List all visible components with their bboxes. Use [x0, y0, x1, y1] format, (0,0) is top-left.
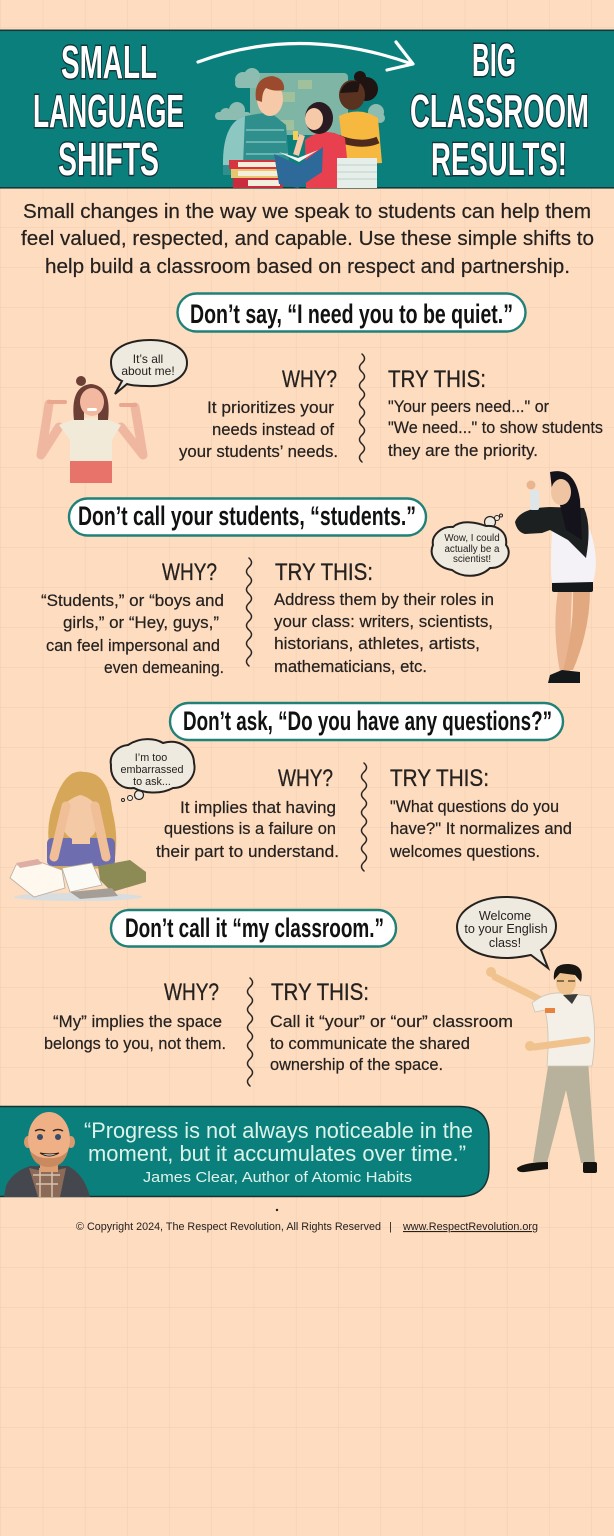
try this column: historians, athletes, artists,: [274, 635, 480, 653]
try this column: [274, 559, 494, 676]
copyright footer: [76, 1221, 538, 1233]
title: small language shifts: SMALL: [61, 36, 157, 88]
quote text: James Clear, Author of Atomic Habits: [143, 1169, 412, 1186]
callout: it's all about me: about me!: [121, 364, 175, 378]
why column: [156, 765, 339, 861]
panel: tip 1: [41, 294, 603, 483]
try this column: mathematicians, etc.: [274, 658, 427, 676]
quote text: [84, 1118, 473, 1186]
heading pill: Don’t call your students, “students.”: [78, 501, 416, 531]
panel: tip 2: [41, 471, 596, 683]
title: big classroom results: [410, 34, 589, 185]
man: [223, 112, 290, 175]
title: small language shifts: SHIFTS: [58, 133, 159, 185]
try this column: TRY THIS:: [275, 559, 373, 586]
callout: wow, I could actually be a scientist: Wow, I could: [444, 533, 500, 544]
woman in red: [305, 132, 350, 188]
callout: wow, I could actually be a scientist: scientist!: [453, 554, 491, 565]
dot mark: [276, 1209, 278, 1211]
intro text: [21, 201, 594, 278]
try this column: [388, 366, 603, 460]
heading pill: [69, 498, 426, 536]
callout: I'm too embarrassed to ask: embarrassed: [120, 764, 184, 776]
header banner: [0, 30, 614, 189]
copyright footer: © Copyright 2024, The Respect Revolution, All Rights Reserved: [76, 1221, 381, 1233]
squiggle divider: [246, 558, 252, 666]
why column: their part to understand.: [156, 843, 339, 861]
why column: girls,” or “Hey, guys,”: [63, 614, 219, 632]
intro text: feel valued, respected, and capable. Use these simple shifts to: [21, 228, 594, 250]
title: small language shifts: [33, 36, 184, 185]
try this column: [389, 765, 572, 861]
why column: [44, 979, 226, 1053]
try this column: they are the priority.: [388, 442, 538, 460]
callout: it's all about me: It’s all: [133, 352, 163, 366]
arrow: [198, 42, 413, 70]
copyright footer: www.RespectRevolution.org: [402, 1221, 538, 1233]
why column: WHY?: [164, 979, 219, 1006]
copyright footer: |: [389, 1221, 392, 1233]
try this column: ownership of the space.: [270, 1056, 443, 1074]
portrait: James Clear: [4, 1112, 90, 1197]
panel: tip 3: [10, 703, 572, 901]
icon: embarrassed student at books: [10, 772, 146, 901]
illustration: three teachers with books: [215, 68, 385, 188]
icon: student holding a test tube: [515, 471, 596, 683]
heading pill: [178, 294, 526, 332]
callout: welcome to your English class: to your English: [464, 922, 548, 936]
why column: It implies that having: [180, 799, 336, 817]
try this column: TRY THIS:: [271, 979, 369, 1006]
intro text: help build a classroom based on respect and partnership.: [45, 256, 570, 278]
quote text: moment, but it accumulates over time.”: [88, 1141, 466, 1166]
quote banner: [0, 1106, 489, 1197]
callout: welcome to your English class: [457, 897, 556, 968]
callout: I'm too embarrassed to ask: to ask...: [133, 776, 171, 788]
why column: “Students,” or “boys and: [41, 592, 224, 610]
squiggle divider: [360, 354, 364, 462]
quote text: “Progress is not always noticeable in the: [84, 1118, 473, 1143]
callout: I'm too embarrassed to ask: I’m too: [135, 752, 167, 764]
why column: WHY?: [282, 366, 337, 393]
why column: needs instead of: [212, 421, 334, 439]
why column: “My” implies the space: [53, 1013, 222, 1031]
try this column: have?" It normalizes and: [390, 820, 572, 838]
heading pill: [111, 910, 396, 946]
title: small language shifts: LANGUAGE: [33, 85, 184, 137]
why column: questions is a failure on: [164, 820, 336, 838]
try this column: to communicate the shared: [270, 1035, 470, 1053]
callout: wow, I could actually be a scientist: [432, 514, 509, 576]
why column: WHY?: [278, 765, 333, 792]
try this column: [270, 979, 513, 1074]
try this column: welcomes questions.: [389, 843, 540, 861]
why column: can feel impersonal and: [46, 637, 220, 655]
panel: tip 4: [44, 897, 597, 1173]
why column: belongs to you, not them.: [44, 1035, 226, 1053]
squiggle divider: [362, 763, 366, 871]
try this column: "Your peers need..." or: [388, 398, 549, 416]
callout: it's all about me: [111, 340, 187, 394]
why column: [179, 366, 338, 461]
squiggle divider: [248, 978, 252, 1086]
callout: wow, I could actually be a scientist: actually be a: [444, 544, 500, 555]
try this column: Address them by their roles in: [274, 591, 494, 609]
icon: woman pointing at herself: [41, 376, 143, 483]
intro text: Small changes in the way we speak to students can help them: [23, 201, 591, 223]
try this column: Call it “your” or “our” classroom: [270, 1013, 513, 1031]
why column: even demeaning.: [104, 659, 224, 677]
icon: teacher welcoming the class: [486, 964, 597, 1173]
title: big classroom results: BIG: [472, 34, 516, 86]
callout: welcome to your English class: class!: [489, 936, 521, 950]
try this column: "We need..." to show students: [388, 419, 603, 437]
books: [229, 160, 279, 169]
why column: WHY?: [162, 559, 217, 586]
woman in yellow: [339, 111, 382, 165]
why column: your students’ needs.: [179, 443, 338, 461]
callout: welcome to your English class: Welcome: [479, 909, 531, 923]
try this column: TRY THIS:: [388, 366, 486, 393]
try this column: "What questions do you: [390, 798, 559, 816]
heading pill: Don’t call it “my classroom.”: [125, 913, 384, 943]
why column: It prioritizes your: [207, 399, 335, 417]
try this column: your class: writers, scientists,: [274, 613, 493, 631]
try this column: TRY THIS:: [390, 765, 489, 792]
why column: [41, 559, 224, 677]
callout: I'm too embarrassed to ask: [111, 739, 195, 802]
